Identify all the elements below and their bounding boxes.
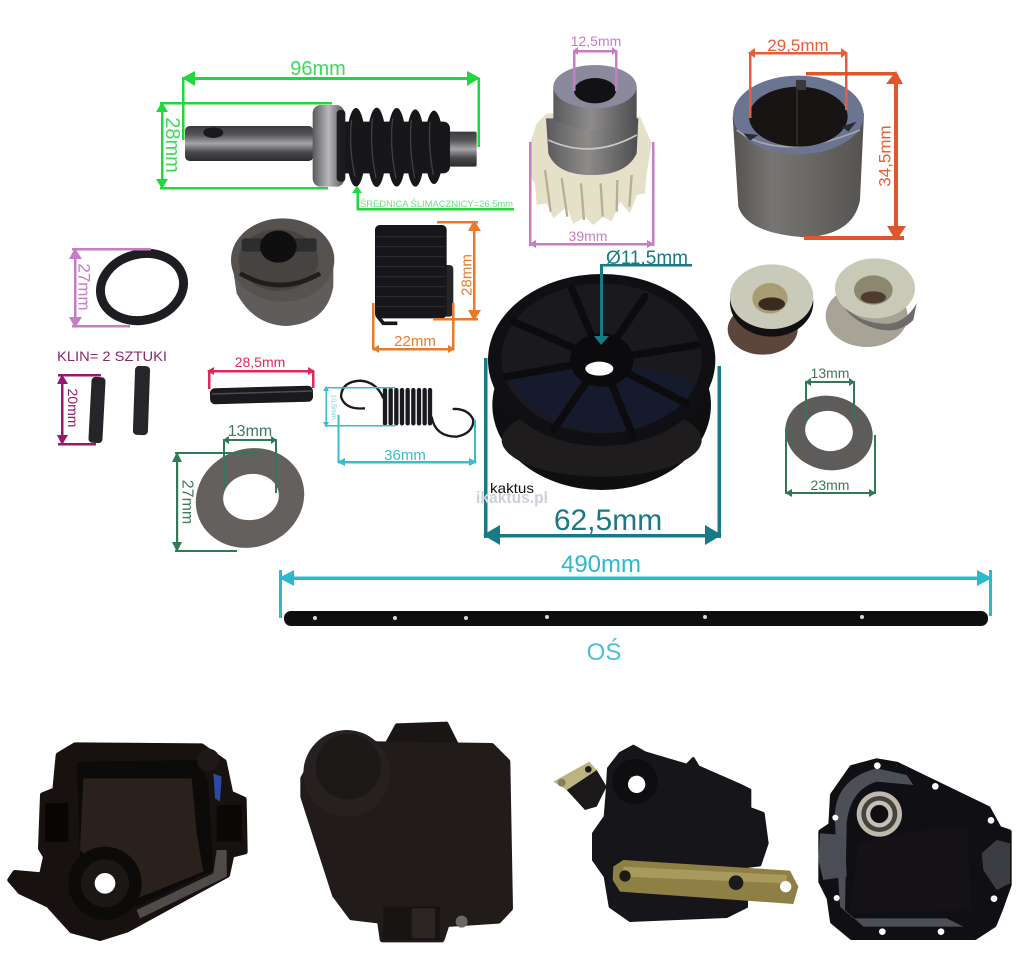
dimension: left washer 27mm: [172, 452, 260, 552]
dimension: bushing height 34,5mm: [804, 71, 906, 241]
dimension: extension spring 36mm: 36mm: [384, 447, 426, 464]
dimension: worm shaft 28mm height: [156, 102, 332, 190]
part: coil torsion spring: [375, 225, 453, 323]
part: extension spring: [341, 381, 473, 437]
dimension: worm diameter note: [352, 186, 514, 210]
part: assembled gearbox with brass arm: [553, 746, 798, 921]
part: axle rod: [284, 611, 988, 626]
part: housing half, interior with shaft hole: [10, 745, 245, 938]
part: right valve seal: [826, 258, 917, 347]
part: roll pin: [210, 386, 313, 404]
dimension: axle 490mm: [279, 551, 992, 618]
dimension: coil spring 22mm: [372, 303, 455, 353]
dimension: bushing height 34,5mm: 34,5mm: [876, 125, 894, 187]
caption: key count: KLIN= 2 SZTUKI: [57, 349, 167, 364]
dimension: worm diameter note: ŚREDNICA ŚLIMACZNICY=26,5mm: [360, 198, 513, 209]
dimension: roll pin 28,5mm: [207, 354, 315, 389]
watermark: ikaktus.pl: ikaktus.pl: [476, 488, 548, 507]
dimension: pulley width 62,5mm: [483, 358, 722, 545]
dimension: coil spring 28mm: 28mm: [458, 254, 476, 296]
dimension: right washer 23mm: [785, 428, 876, 497]
dimension: worm shaft 28mm height: 28mm: [161, 117, 183, 173]
label: kaktus: kaktus: [490, 480, 534, 496]
dimension: coil spring 28mm: [433, 220, 481, 321]
dimension: ring 27mm: [69, 248, 151, 328]
dimension: worm shaft 96mm length: [182, 58, 480, 147]
dimension: right washer 23mm: 23mm: [811, 477, 849, 493]
dimension: axle 490mm: 490mm: [561, 551, 641, 578]
part: steel bushing: [733, 76, 864, 237]
part: housing cover, closed exterior: [303, 723, 510, 940]
dimension: coil spring 22mm: 22mm: [394, 333, 436, 350]
dimension: extension spring 10,5mm: 10,5mm: [330, 394, 336, 420]
dimension: ring 27mm: 27mm: [74, 263, 94, 311]
label: axle: OŚ: [587, 638, 621, 666]
part: two key pins: [88, 366, 150, 443]
dimension: key 20mm: [57, 374, 101, 446]
dimension: gear width 39mm: [529, 142, 654, 248]
dimension: extension spring 36mm: [337, 415, 477, 466]
dimension: extension spring 10,5mm: [323, 386, 395, 427]
dimension: bushing bore 29,5mm: [748, 36, 848, 118]
part: keyed steel cap: [231, 218, 334, 326]
part: rubber ring: [93, 245, 191, 329]
dimension: left washer 13mm: [223, 423, 277, 493]
dimension: gear bore 12,5mm: 12,5mm: [571, 33, 621, 49]
dimension: roll pin 28,5mm: 28,5mm: [235, 354, 285, 370]
dimension: left washer 27mm: 27mm: [178, 480, 196, 524]
dimension: pulley width 62,5mm: 62,5mm: [554, 504, 662, 537]
part: plastic gear with steel hub: [530, 65, 652, 225]
dimension: key 20mm: 20mm: [65, 389, 81, 427]
part: flat washer, left: [181, 432, 319, 564]
dimension: right washer 13mm: [805, 365, 855, 422]
dimension: bushing bore 29,5mm: 29,5mm: [767, 36, 829, 55]
dimension: left washer 13mm: 13mm: [228, 423, 272, 440]
dimension: gear bore 12,5mm: [571, 33, 621, 91]
part: worm shaft: [185, 105, 477, 187]
dimension: worm shaft 96mm length: 96mm: [290, 58, 346, 80]
part: housing half, interior with ball bearing: [818, 761, 1010, 938]
dimension: gear width 39mm: 39mm: [569, 228, 607, 244]
dimension: pulley bore Ø11,5mm: Ø11,5mm: [606, 248, 688, 269]
part: flat washer, right: [778, 388, 880, 478]
dimension: right washer 13mm: 13mm: [811, 365, 849, 381]
part: left valve seal: [728, 264, 813, 355]
dimension: pulley bore Ø11,5mm: [594, 248, 692, 345]
part: black pulley wheel: [488, 274, 715, 490]
